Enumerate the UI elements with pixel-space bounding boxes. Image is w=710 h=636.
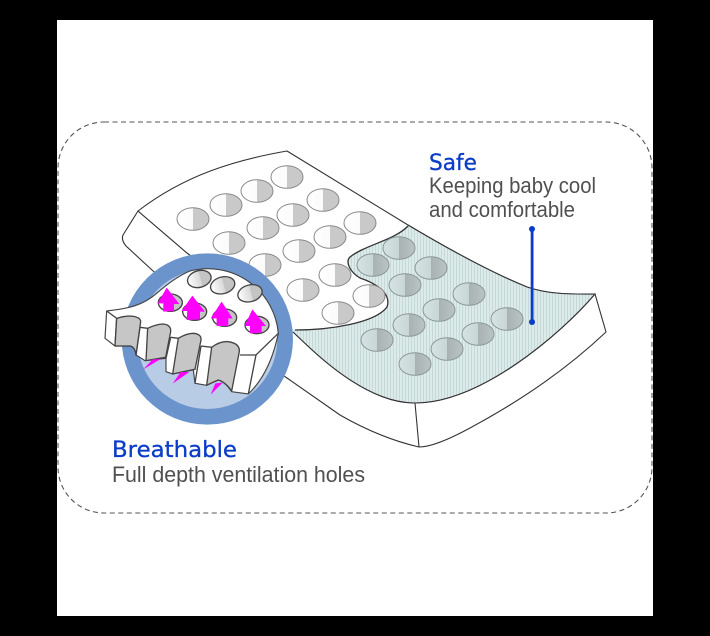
foam chunk silhouette bbox=[105, 269, 278, 394]
white page panel bbox=[57, 20, 653, 616]
foam channel 4 bbox=[207, 342, 239, 391]
light blue inner disc bbox=[137, 269, 277, 409]
chunk holes bbox=[158, 268, 269, 334]
callout line bbox=[529, 226, 535, 325]
ventilation holes on foam bbox=[177, 166, 385, 324]
safe description bbox=[429, 173, 596, 222]
fabric edges bbox=[293, 225, 595, 403]
ventilation holes under fabric bbox=[357, 237, 523, 375]
fabric cut line bbox=[295, 226, 408, 330]
safe description: Keeping baby cool bbox=[429, 173, 596, 198]
breathable description: Full depth ventilation holes bbox=[112, 462, 365, 487]
magenta air arrows bbox=[143, 288, 266, 395]
safe description: and comfortable bbox=[429, 197, 575, 222]
mattress front corner edge bbox=[415, 403, 419, 447]
foam channel 3 bbox=[173, 333, 201, 374]
dashed rounded border bbox=[58, 122, 652, 513]
blue ring bbox=[122, 253, 293, 425]
mattress side faces bbox=[122, 211, 606, 447]
safe heading: Safe bbox=[429, 151, 477, 176]
magnified circle detail bbox=[105, 253, 293, 425]
foam front edge lines bbox=[107, 311, 278, 394]
mattress top surface bbox=[138, 151, 595, 403]
foam channel 1 bbox=[115, 316, 141, 355]
mattress illustration bbox=[122, 151, 606, 447]
cooling fabric layer bbox=[285, 225, 595, 403]
breathable heading: Breathable bbox=[112, 437, 237, 463]
foam channel 2 bbox=[146, 324, 171, 361]
